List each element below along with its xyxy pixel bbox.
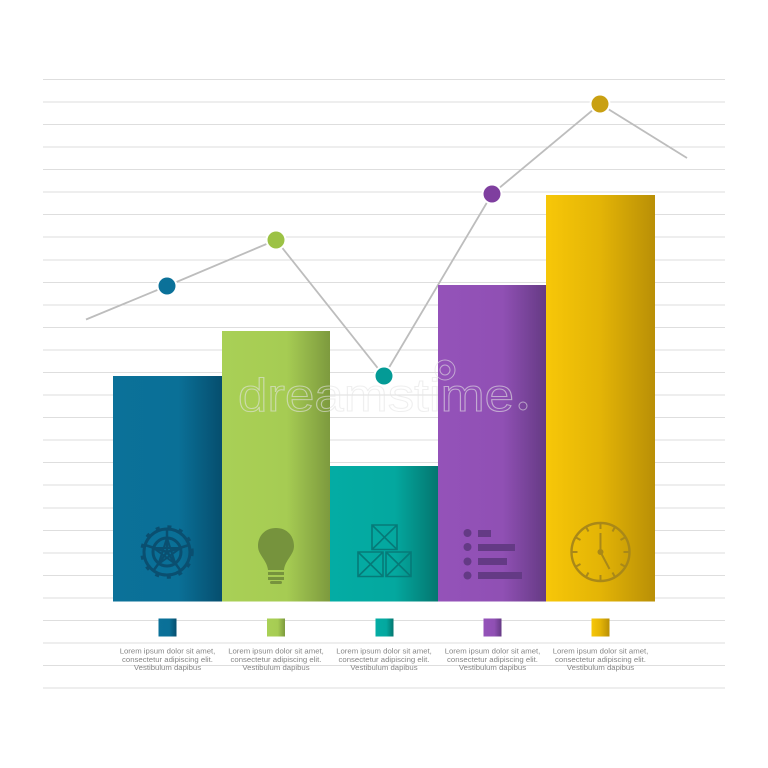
caption: Vestibulum dapibus <box>134 663 201 672</box>
caption: consectetur adipiscing elit. <box>231 655 321 664</box>
caption: consectetur adipiscing elit. <box>555 655 646 664</box>
bar: green bulb <box>222 331 330 602</box>
icon: list <box>464 529 522 580</box>
icon: light bulb <box>258 528 294 584</box>
caption: Lorem ipsum dolor sit amet, <box>553 646 648 656</box>
bar: blue gear <box>113 376 222 602</box>
caption: Vestibulum dapibus <box>350 663 418 672</box>
legend: green <box>228 618 324 672</box>
caption: Lorem ipsum dolor sit amet, <box>120 646 215 656</box>
caption: Lorem ipsum dolor sit amet, <box>336 646 432 656</box>
caption: Vestibulum dapibus <box>242 663 310 672</box>
watermark: dreamstime <box>238 369 514 421</box>
icon: gear <box>142 527 192 577</box>
caption: Lorem ipsum dolor sit amet, <box>228 646 324 656</box>
caption: Vestibulum dapibus <box>567 663 634 672</box>
bar: yellow clock <box>546 195 655 602</box>
line chart <box>86 94 687 386</box>
caption: Vestibulum dapibus <box>459 663 526 672</box>
legend: purple <box>445 618 540 672</box>
legend: teal <box>336 618 432 672</box>
caption: consectetur adipiscing elit. <box>447 655 538 664</box>
caption: consectetur adipiscing elit. <box>122 655 213 664</box>
icon: clock <box>572 523 630 581</box>
caption: consectetur adipiscing elit. <box>339 655 429 664</box>
legend: yellow <box>553 618 648 672</box>
bar: purple list <box>438 285 546 602</box>
caption: Lorem ipsum dolor sit amet, <box>445 646 540 656</box>
bar: teal boxes <box>330 466 438 602</box>
icon: boxes <box>358 525 411 576</box>
legend: blue <box>120 618 215 672</box>
